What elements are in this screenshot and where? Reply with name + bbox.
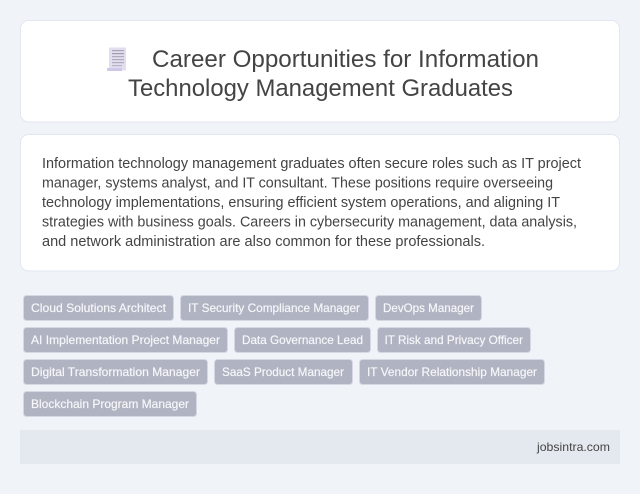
tag: AI Implementation Project Manager — [24, 328, 228, 352]
tag: Digital Transformation Manager: Digital Transformation Manager — [31, 365, 200, 379]
panel: title header — [20, 20, 620, 122]
tag: Data Governance Lead: Data Governance Lead — [242, 333, 363, 347]
tag: DevOps Manager — [376, 296, 482, 320]
description text: technology implementations, ensuring efficient system operations, and aligning IT — [42, 195, 560, 211]
title text — [128, 46, 539, 102]
description text: manager, systems analyst, and IT consultant. These positions require overseeing — [42, 176, 553, 192]
tag: Cloud Solutions Architect: Cloud Solutions Architect — [31, 301, 167, 315]
description text: strategies with business goals. Careers in cybersecurity management, data analysis, — [42, 214, 577, 230]
tag: IT Security Compliance Manager: IT Security Compliance Manager — [188, 301, 360, 315]
footer source text: jobsintra.com — [536, 440, 610, 454]
tag: Cloud Solutions Architect — [24, 296, 174, 320]
description text: Information technology management graduates often secure roles such as IT project — [42, 156, 581, 172]
tag: Data Governance Lead — [234, 328, 370, 352]
icon: document scroll — [107, 48, 126, 71]
title text: Technology Management Graduates — [128, 75, 513, 102]
panel: description — [20, 134, 620, 271]
tag: IT Vendor Relationship Manager: IT Vendor Relationship Manager — [367, 365, 537, 379]
tag: IT Risk and Privacy Officer: IT Risk and Privacy Officer — [384, 333, 523, 347]
tag: IT Vendor Relationship Manager — [360, 360, 544, 384]
title text: Career Opportunities for Information — [152, 46, 539, 73]
tag: IT Security Compliance Manager — [180, 296, 368, 320]
tag: Blockchain Program Manager: Blockchain Program Manager — [31, 397, 189, 411]
description text — [42, 156, 581, 250]
tag: AI Implementation Project Manager: AI Implementation Project Manager — [31, 333, 220, 347]
footer bar — [20, 430, 620, 464]
tag: SaaS Product Manager — [214, 360, 352, 384]
tag: Digital Transformation Manager — [24, 360, 208, 384]
tag list — [24, 296, 544, 416]
tag: DevOps Manager: DevOps Manager — [383, 301, 474, 315]
tag: IT Risk and Privacy Officer — [378, 328, 530, 352]
description text: and network administration are also common for these professionals. — [42, 234, 485, 250]
tag: SaaS Product Manager: SaaS Product Manager — [222, 365, 344, 379]
tag: Blockchain Program Manager — [24, 392, 196, 416]
